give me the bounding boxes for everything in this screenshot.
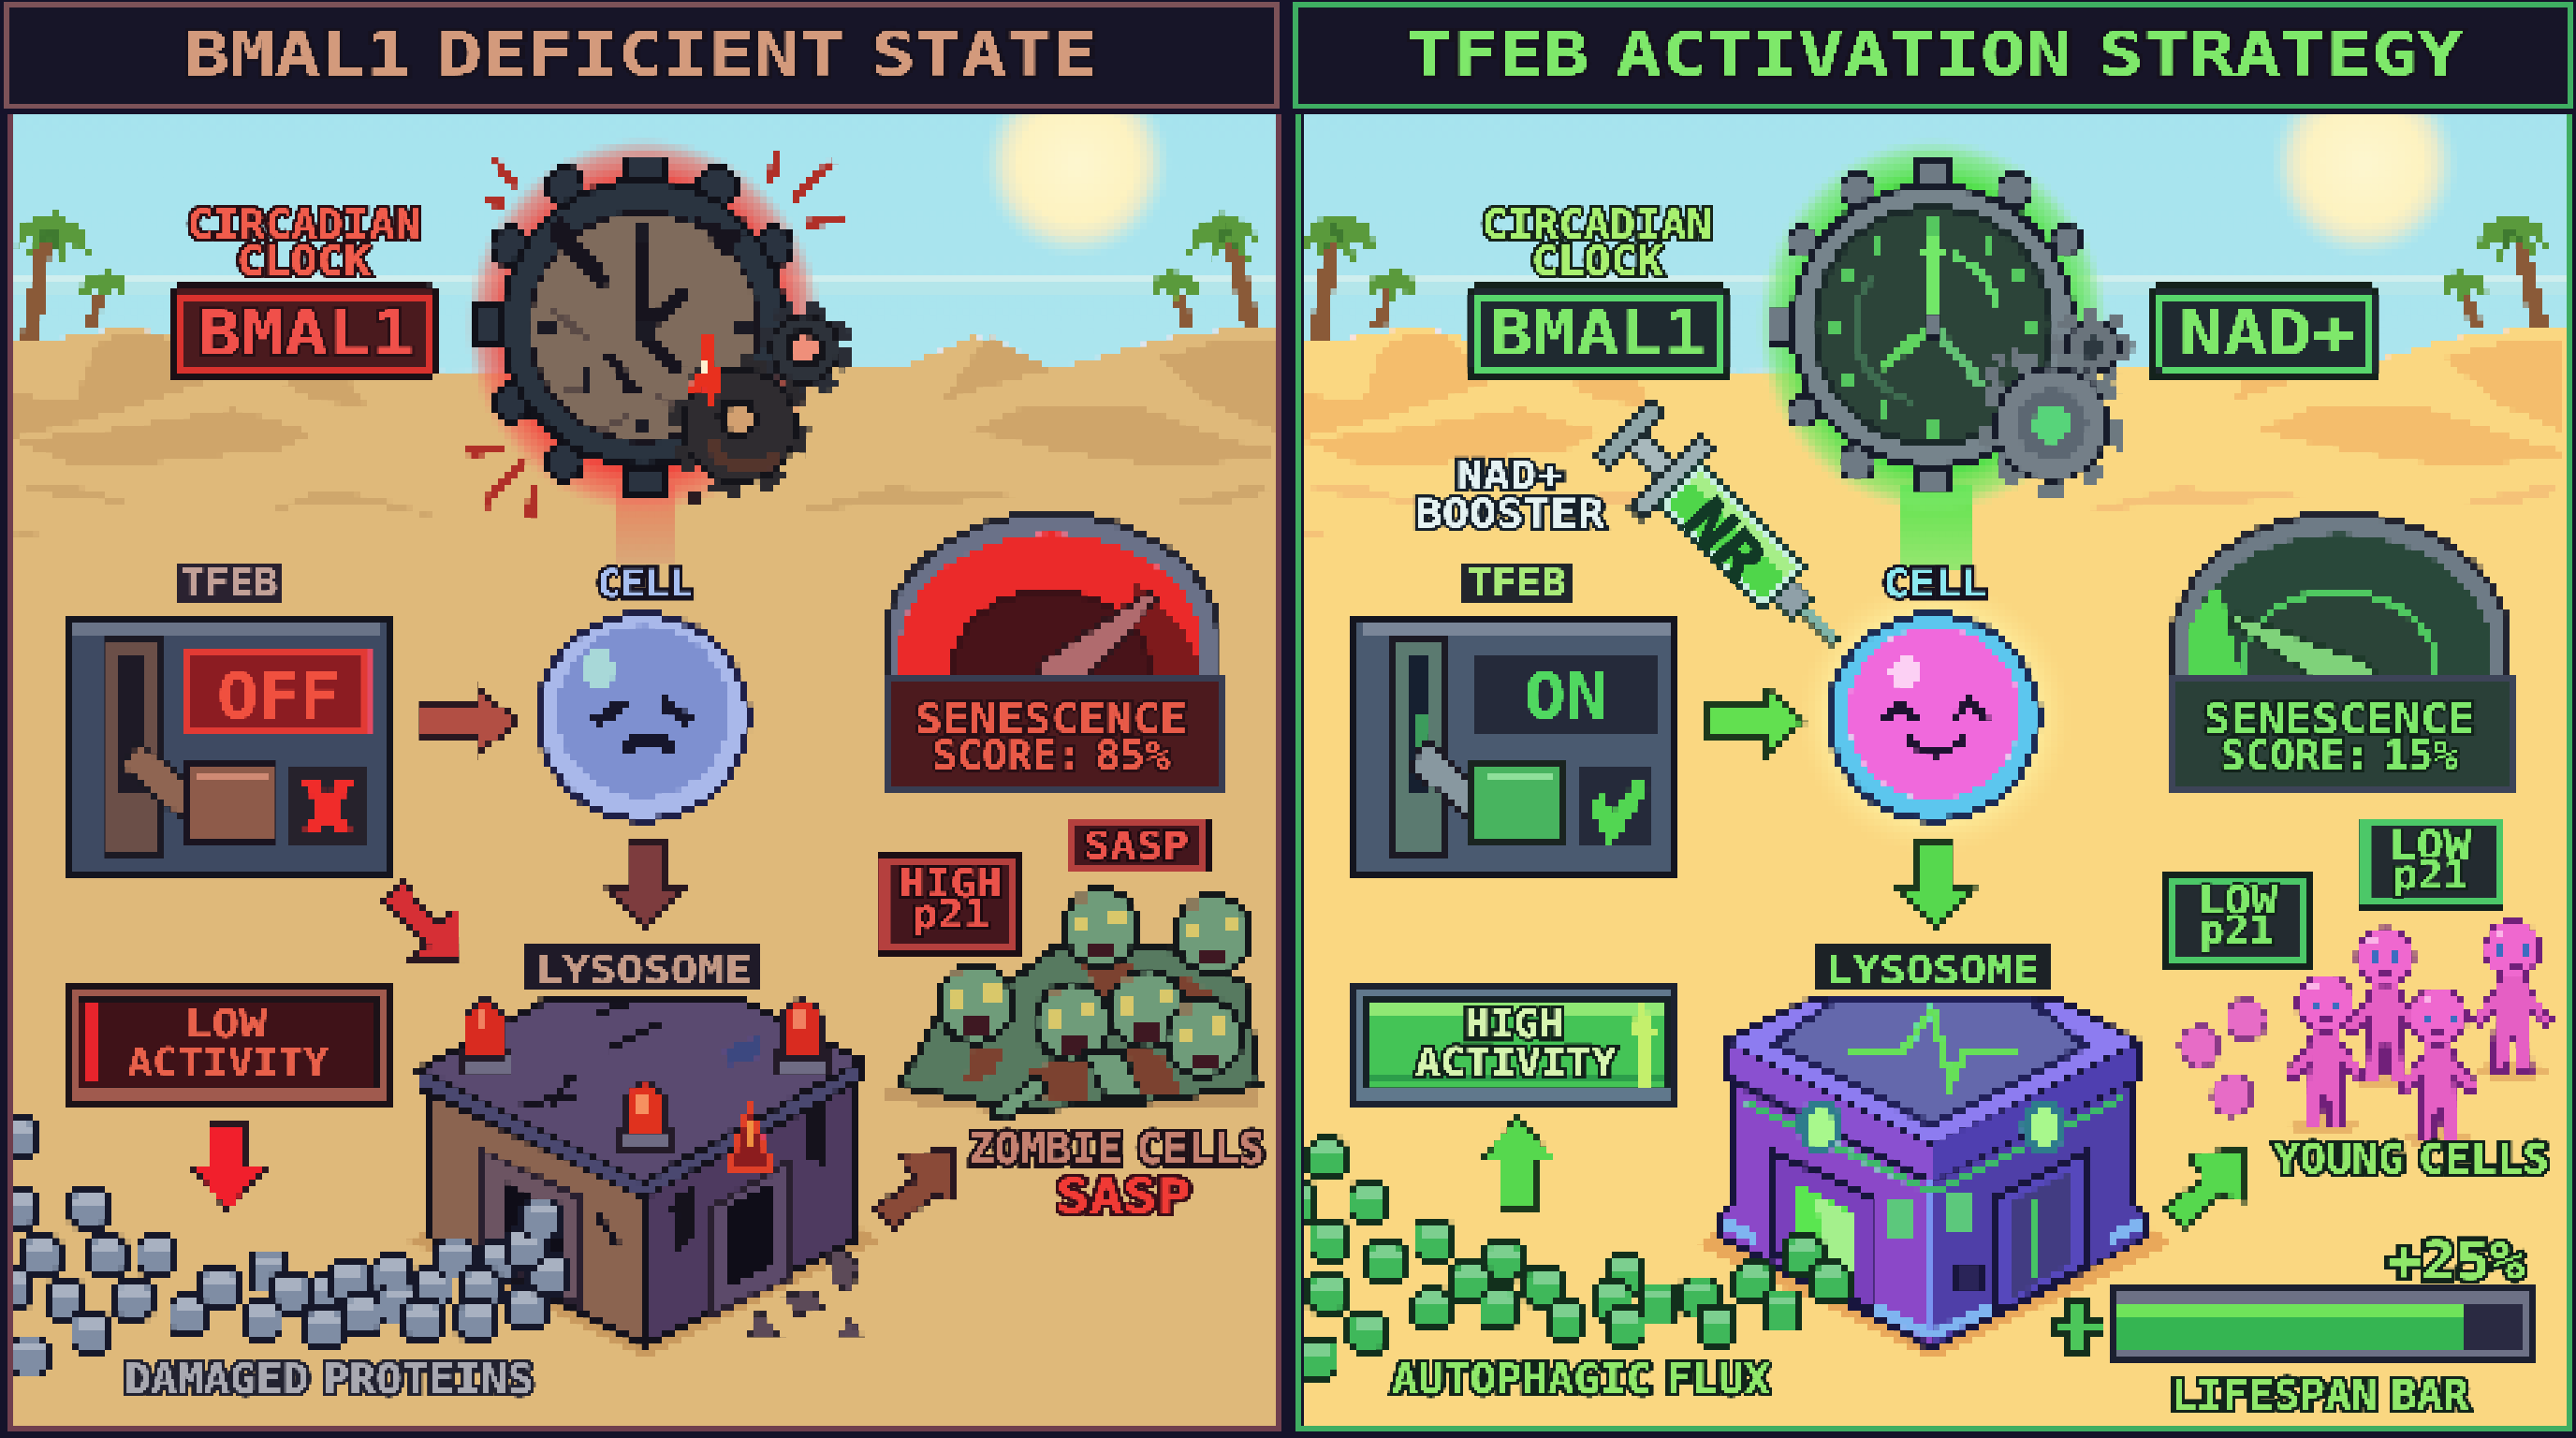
- label: senescence score 15: SENESCENCE: [2203, 696, 2475, 743]
- TFEB switch OFF: [67, 619, 388, 877]
- NAD+ box: [2152, 287, 2378, 377]
- label: low activity: [127, 1001, 329, 1085]
- arrow: switch to lysosome: [382, 882, 460, 960]
- label: TFEB (right): TFEB: [1467, 562, 1566, 605]
- lifespan bar: [2053, 1290, 2535, 1359]
- header: BMAL1 deficient state: [0, 5, 1284, 114]
- arrow: lysosome to zombie cells: [874, 1150, 955, 1228]
- arrow: cell to lysosome (healthy): [1895, 842, 1974, 929]
- label: young cells: YOUNG CELLS: [2274, 1136, 2549, 1183]
- label: circadian clock (left): [187, 201, 421, 286]
- label: NAD+ booster: [1415, 452, 1605, 536]
- label: senescence score 15: [2203, 696, 2475, 780]
- label: CELL (left): CELL: [597, 563, 693, 606]
- label: high activity: [1415, 1001, 1617, 1085]
- label: high activity: HIGH: [1465, 1001, 1563, 1047]
- healthy circadian clock: [1757, 139, 2125, 569]
- label: low p21 one: LOW: [2198, 877, 2278, 923]
- arrow: cell to lysosome (deficient): [607, 842, 686, 929]
- panel: BMAL1 deficient state backdrop: [0, 70, 1288, 1434]
- title: left: BMAL1 DEFICIENT STATE: [184, 21, 1097, 90]
- label: high p21: p21: [912, 891, 989, 937]
- label: senescence score 85: SCORE: 85%: [932, 732, 1171, 780]
- label: circadian clock (right): [1482, 201, 1712, 286]
- young cells group: [2180, 921, 2554, 1148]
- label: damaged proteins: DAMAGED PROTEINS: [124, 1356, 534, 1403]
- label: NAD+ booster: NAD+: [1456, 452, 1563, 498]
- label: ON: ON: [1524, 660, 1608, 734]
- header: TFEB activation strategy: [1292, 5, 2576, 114]
- autophagic flux green cubes: [1278, 1139, 1849, 1377]
- arrow: lysosome to young cells: [2162, 1150, 2243, 1228]
- label: circadian clock (left): CLOCK: [237, 238, 372, 286]
- label: lysosome (left): LYSOSOME: [535, 949, 752, 992]
- lysosome label plate (deficient): [526, 944, 760, 992]
- label: SASP: SASP: [1056, 1169, 1191, 1224]
- arrow: switch to healthy cell: [1706, 688, 1806, 756]
- label: high activity: ACTIVITY: [1415, 1039, 1617, 1085]
- label: senescence score 85: [915, 696, 1187, 780]
- label: zombie cells: ZOMBIE CELLS: [969, 1123, 1265, 1174]
- label: OFF: OFF: [217, 660, 341, 734]
- syringe NR booster: [1588, 392, 1872, 677]
- happy pink cell: [1798, 581, 2070, 853]
- label: low activity: ACTIVITY: [127, 1039, 329, 1085]
- lysosome label plate (healthy): [1818, 944, 2052, 992]
- ruined lysosome: [408, 1000, 878, 1359]
- label: NAD+ booster: BOOSTER: [1415, 491, 1605, 536]
- label: BMAL1 (left): BMAL1: [198, 298, 415, 370]
- high p21 badge: [879, 856, 1020, 952]
- active lysosome: [1696, 1000, 2172, 1359]
- sad blue cell: [538, 614, 748, 820]
- TFEB label plate: [174, 564, 284, 606]
- label: circadian clock (right): CIRCADIAN: [1482, 201, 1712, 249]
- label: senescence score 15: SCORE: 15%: [2220, 732, 2459, 780]
- label: low p21 one: p21: [2200, 907, 2274, 953]
- label: low activity: LOW: [184, 1001, 268, 1047]
- label: low p21 two: p21: [2393, 852, 2468, 898]
- damaged protein pile: [0, 1117, 567, 1376]
- right panel frame: [1298, 114, 2569, 1429]
- gauge 15 percent: [2174, 513, 2510, 791]
- panel: TFEB activation strategy backdrop: [1288, 70, 2576, 1434]
- broken circadian clock: [466, 139, 846, 564]
- label: TFEB (left): TFEB: [181, 562, 278, 605]
- low p21 badge 1: [2167, 874, 2308, 968]
- label: high p21: [900, 860, 1002, 937]
- TFEB switch ON: [1355, 619, 1676, 877]
- label: BMAL1 (right): BMAL1: [1489, 298, 1706, 370]
- label: low p21 one: [2198, 877, 2278, 953]
- label: lysosome (right): LYSOSOME: [1826, 949, 2040, 992]
- left panel frame: [10, 114, 1279, 1429]
- label: CELL (right): CELL: [1883, 563, 1986, 606]
- low activity panel: [67, 985, 388, 1102]
- label: plus 25 percent: +25%: [2387, 1231, 2525, 1292]
- label: high p21: HIGH: [900, 860, 1002, 906]
- label: SASP badge: SASP: [1084, 825, 1189, 868]
- label: autophagic flux: AUTOPHAGIC FLUX: [1392, 1356, 1770, 1403]
- label: circadian clock (right): CLOCK: [1531, 238, 1664, 286]
- TFEB label plate right: [1462, 564, 1572, 606]
- label: low p21 two: [2389, 822, 2472, 898]
- green arrow up: [1481, 1118, 1555, 1208]
- title: right: TFEB ACTIVATION STRATEGY: [1407, 21, 2464, 90]
- SASP badge: [1067, 818, 1209, 873]
- senescence gauge 85 percent: [886, 513, 1222, 791]
- label: senescence score 85: SENESCENCE: [915, 696, 1187, 743]
- zombie cell cluster: [885, 888, 1259, 1120]
- label: NAD+: NAD+: [2179, 298, 2356, 370]
- label: lifespan bar: LIFESPAN BAR: [2171, 1372, 2469, 1419]
- low p21 badge 2: [2360, 818, 2503, 909]
- label: circadian clock (left): CIRCADIAN: [187, 201, 421, 249]
- arrow: switch to cell: [418, 688, 518, 756]
- high activity panel: [1355, 985, 1676, 1102]
- BMAL1 box (restored): [1468, 287, 1730, 377]
- label: NR on syringe: NR: [1669, 485, 1779, 596]
- red arrow down: [191, 1123, 267, 1211]
- BMAL1 box (deficient): [171, 287, 435, 377]
- label: low p21 two: LOW: [2389, 822, 2472, 868]
